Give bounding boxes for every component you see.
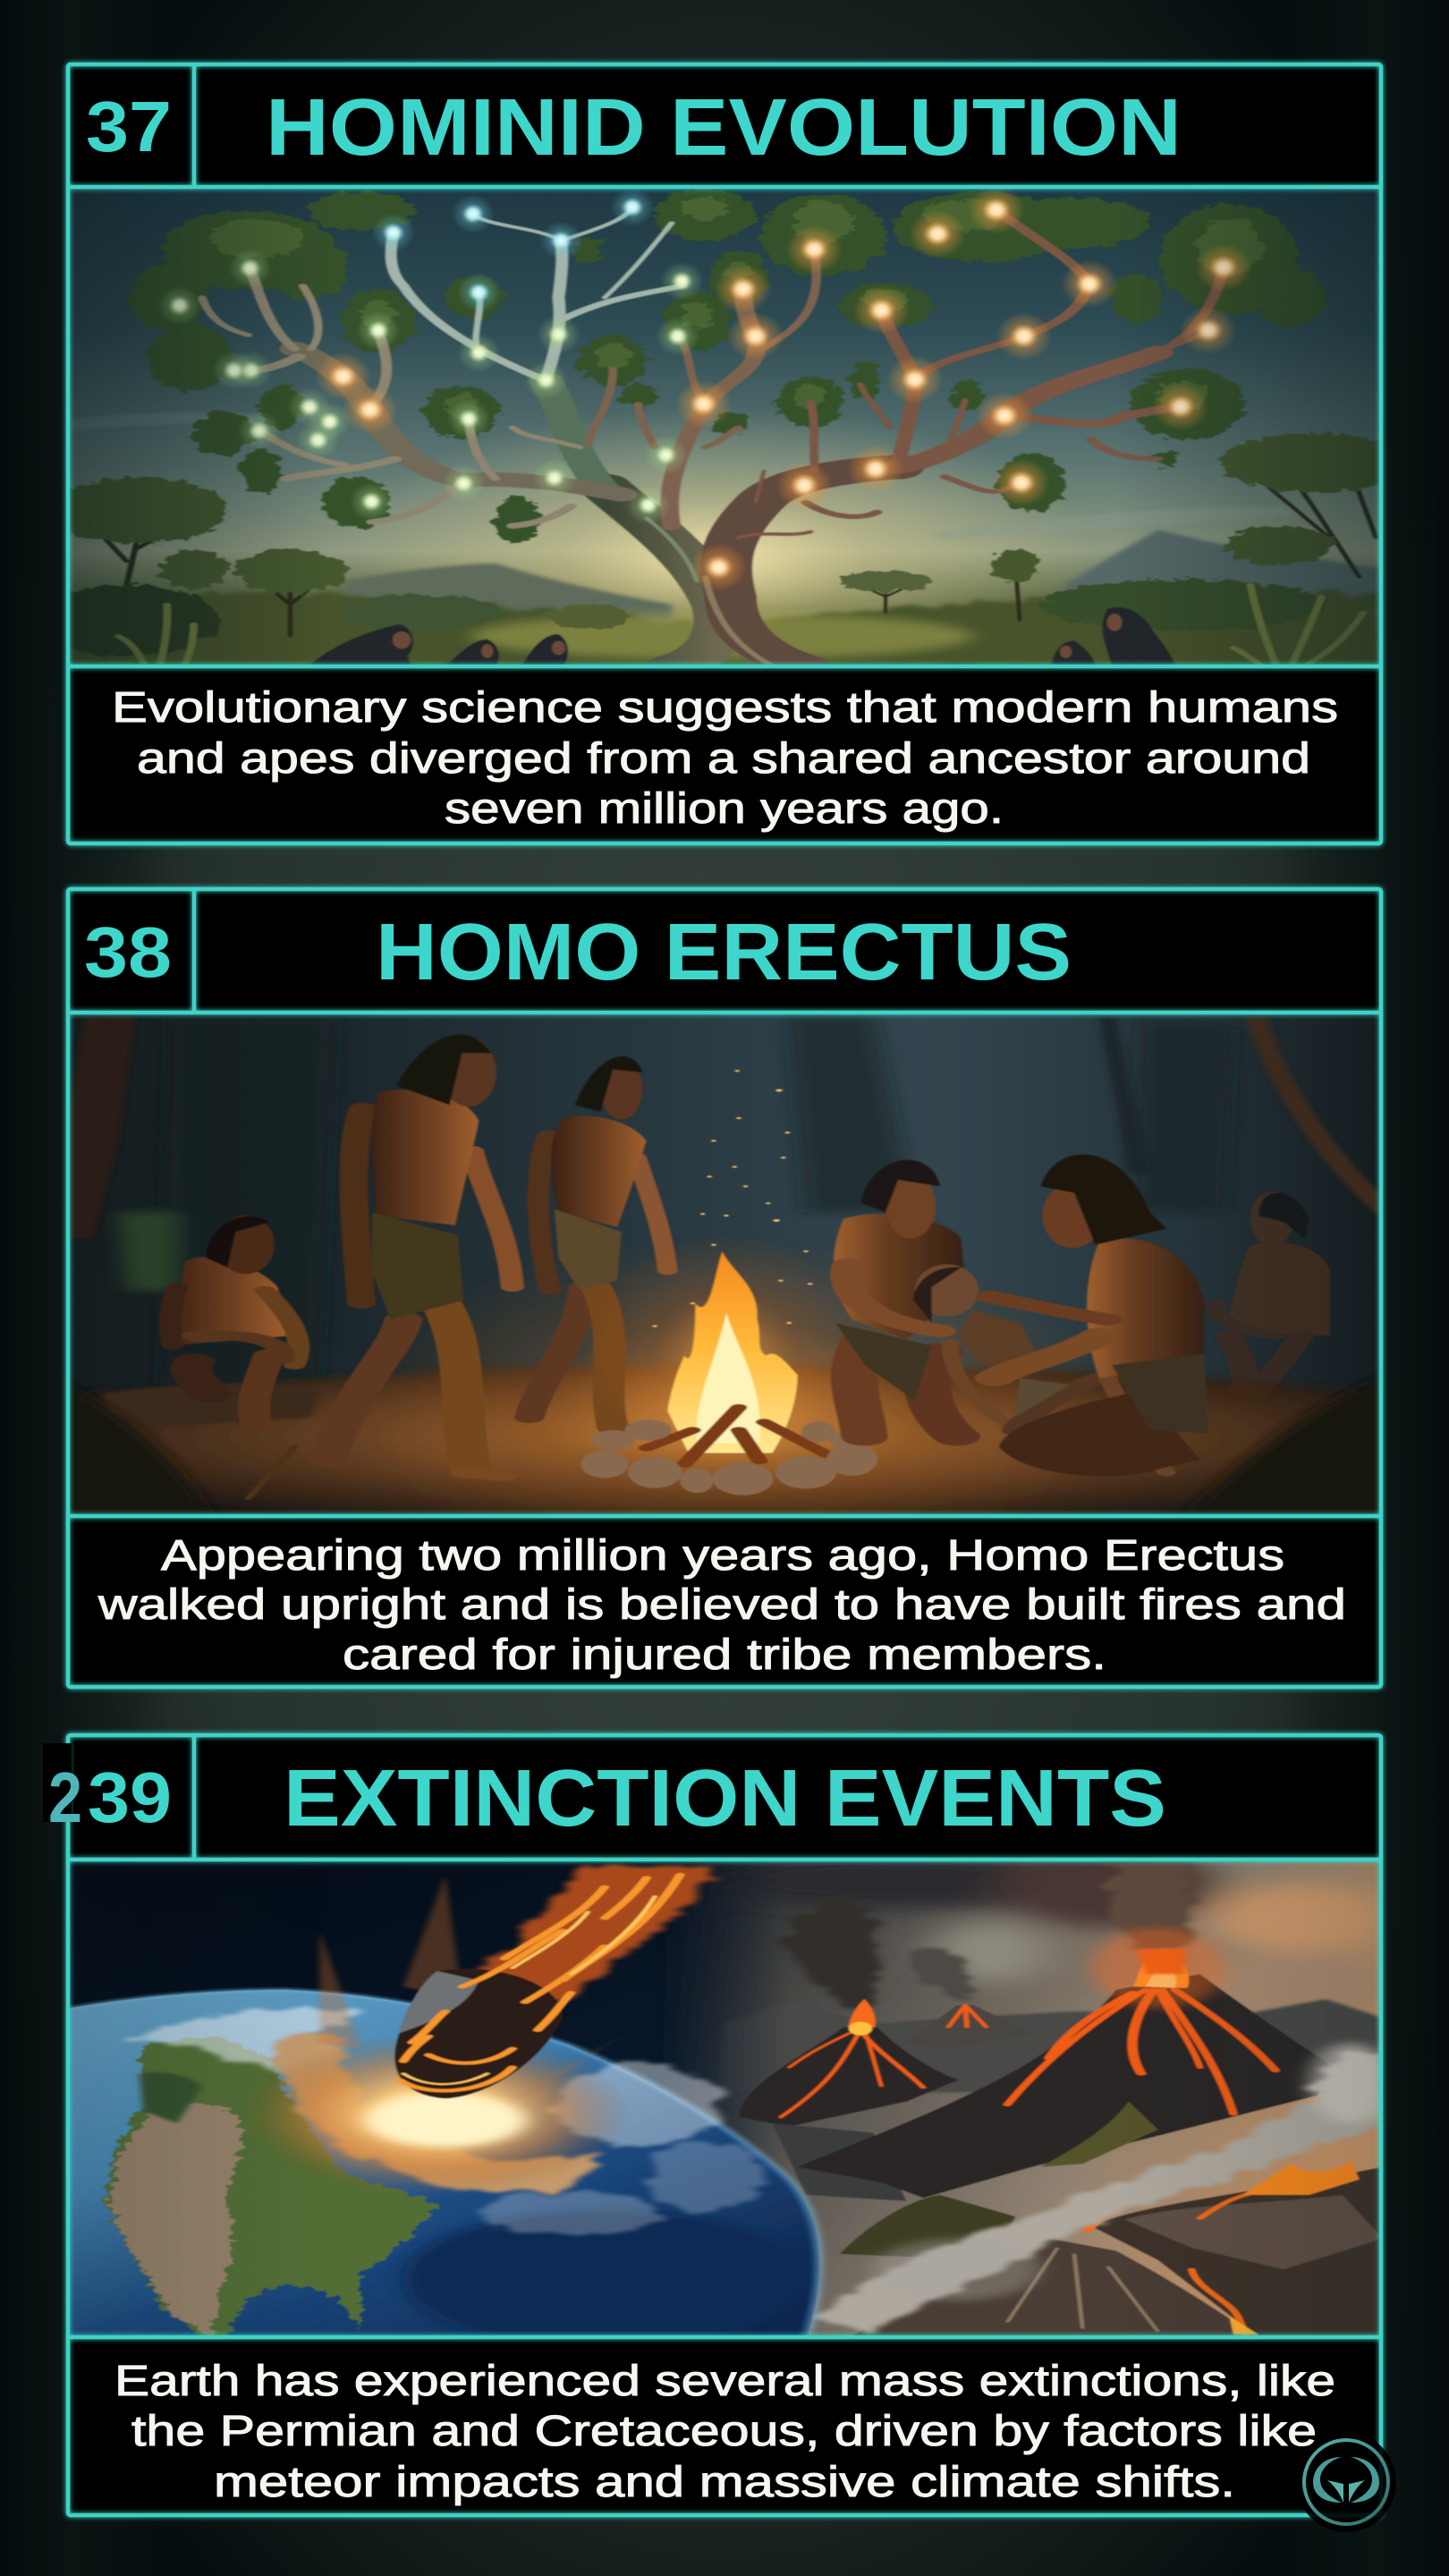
- section number 239: 39: [88, 1758, 172, 1837]
- ground: [68, 1365, 1383, 1524]
- illustration: meteor and volcanoes: [68, 1847, 1393, 2347]
- panel: extinction events: [43, 1735, 1396, 2532]
- caption text: Evolutionary science suggests that modern humans: [112, 684, 1338, 732]
- fur mat: [102, 1384, 319, 1427]
- apes: [307, 607, 1175, 667]
- smoke plumes: [788, 1862, 1193, 2008]
- panel frame: [68, 64, 1381, 843]
- panel frame: [68, 1735, 1381, 2515]
- walking figure one: [328, 1035, 513, 1477]
- tree branches: [202, 208, 1224, 538]
- walking figure two: [530, 1056, 667, 1428]
- caption text: Earth has experienced several mass extinctions, like: [114, 2358, 1335, 2405]
- big volcano: [798, 1974, 1335, 2198]
- section number 239: 2: [48, 1758, 82, 1837]
- title: HOMO ERECTUS: [376, 908, 1072, 997]
- illustration: campfire scene: [51, 1013, 1402, 1576]
- meteor: [394, 1865, 718, 2098]
- caption text: [97, 1532, 1346, 1679]
- caption text: [112, 684, 1338, 833]
- north america: [106, 2037, 437, 2341]
- kneeling figure: [834, 1160, 965, 1436]
- volcanic sky: [655, 1847, 1393, 2341]
- glowing nodes: [157, 185, 1252, 591]
- caption text: cared for injured tribe members.: [343, 1631, 1106, 1679]
- section number 239: [48, 1758, 172, 1837]
- injured child: [913, 1265, 1166, 1472]
- steam clouds: [823, 2049, 1383, 2334]
- mountains: [68, 412, 1383, 628]
- background trees: [102, 486, 1379, 638]
- icon: circular logo badge: [1296, 2432, 1396, 2532]
- title: HOMINID EVOLUTION: [266, 83, 1182, 173]
- caption text: the Permian and Cretaceous, driven by factors like: [131, 2408, 1317, 2455]
- tree foliage: [129, 190, 1326, 543]
- left seated figure: [169, 1216, 299, 1424]
- impact blast: [244, 1875, 630, 2195]
- water: [773, 2123, 907, 2201]
- section number 37: 37: [86, 87, 172, 166]
- panel: homo erectus: [51, 889, 1402, 1687]
- caption text: walked upright and is believed to have built fires and: [97, 1581, 1346, 1629]
- vegetation band: [68, 589, 1383, 667]
- caption text: Appearing two million years ago, Homo Erectus: [161, 1532, 1284, 1580]
- lava: [781, 1989, 1275, 2117]
- right seated figure: [1216, 1191, 1330, 1391]
- caption text: [114, 2358, 1335, 2506]
- small volcano: [739, 2027, 959, 2126]
- caption text: and apes diverged from a shared ancestor around: [137, 735, 1310, 783]
- number patch: [43, 1743, 72, 1822]
- panel frame: [68, 889, 1381, 1687]
- foreground roots: [51, 1371, 1402, 1528]
- foreground land: [840, 2195, 1015, 2260]
- earth: [68, 1989, 819, 2341]
- panel: hominid evolution: [34, 64, 1414, 843]
- caption text: seven million years ago.: [445, 785, 1004, 833]
- small back volcano: [907, 2005, 1032, 2049]
- tree trunk: [294, 349, 898, 667]
- illustration: tree of evolution: [70, 189, 1379, 665]
- caption text: meteor impacts and massive climate shifts.: [214, 2459, 1235, 2506]
- fire: [581, 1070, 877, 1496]
- forest backdrop: [118, 1017, 1233, 1385]
- section number 38: 38: [84, 912, 172, 992]
- caregiver: [990, 1155, 1208, 1476]
- title: EXTINCTION EVENTS: [284, 1754, 1166, 1843]
